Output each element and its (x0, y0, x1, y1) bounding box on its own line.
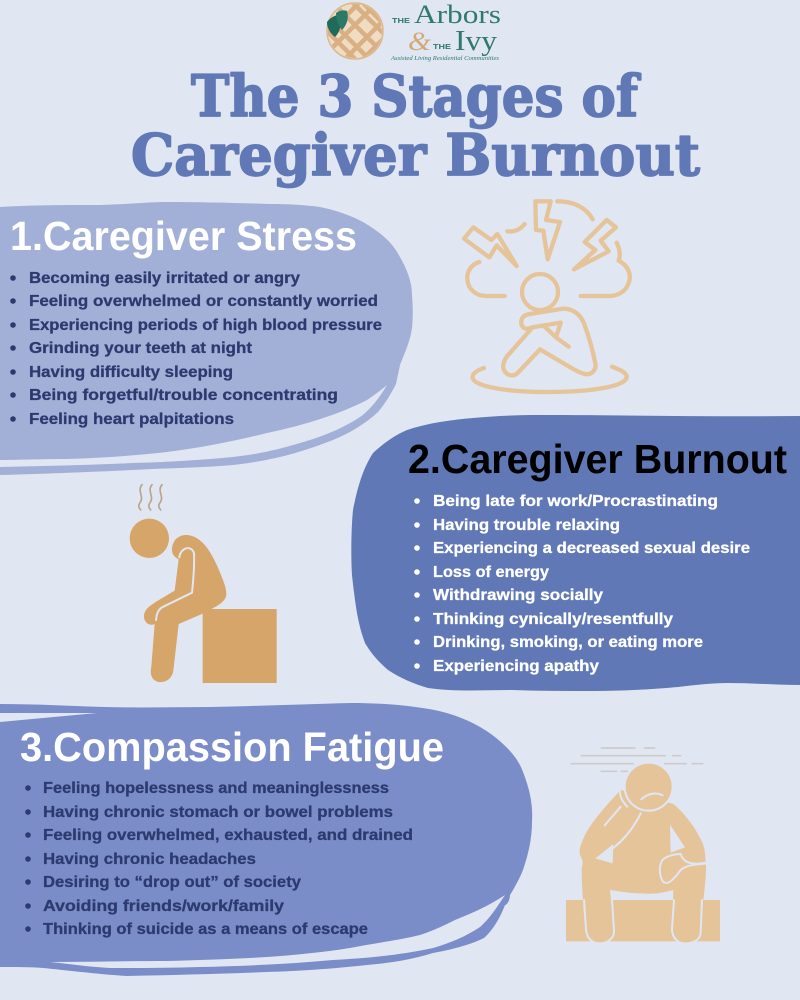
list 3: Desiring to “drop out” of society (43, 874, 301, 891)
list 2: Experiencing a decreased sexual desire (433, 540, 750, 557)
list 3: Having chronic headaches (43, 851, 256, 868)
body highlights (584, 790, 707, 943)
list 2: Experiencing apathy (433, 658, 599, 675)
list 1: Being forgetful/trouble concentrating (29, 387, 338, 404)
list 2: Drinking, smoking, or eating more (433, 634, 703, 651)
panel 3 blob with brush underline (0, 703, 532, 976)
box (203, 609, 277, 683)
list 2: Loss of energy (433, 564, 549, 581)
frown (641, 794, 663, 799)
bench (566, 900, 720, 941)
list 2: Withdrawing socially (433, 587, 603, 604)
body (144, 535, 226, 682)
panel 2 blob (351, 415, 800, 691)
list 3: Feeling overwhelmed, exhausted, and drained (43, 827, 413, 844)
list 3: Feeling hopelessness and meaninglessness (43, 780, 389, 797)
list 1: Experiencing periods of high blood pressure (29, 317, 382, 334)
list 3: Thinking of suicide as a means of escape (43, 921, 368, 938)
list 2 (414, 493, 750, 675)
icon: slumped person on box (130, 485, 277, 683)
logo wordmark: THE (392, 18, 410, 25)
list 1: Feeling heart palpitations (29, 411, 234, 428)
arm gap right (670, 825, 685, 853)
logo wordmark: Ivy (455, 26, 497, 57)
logo wordmark: & (408, 27, 432, 56)
list 2: Being late for work/Procrastinating (433, 493, 718, 510)
head (625, 763, 673, 811)
icon: lattice circle with leaves (326, 2, 384, 60)
icon: dejected person with head on hand (566, 748, 720, 943)
logo wordmark (390, 0, 501, 62)
list 1: Having difficulty sleeping (29, 364, 233, 381)
list 1: Feeling overwhelmed or constantly worried (29, 293, 378, 310)
logo wordmark: Arbors (414, 0, 501, 29)
brush sliver bottom (50, 895, 505, 968)
panel: caregiver stress (0, 202, 413, 475)
heading 1: 1.Caregiver Stress (10, 213, 357, 259)
brush sliver top (0, 713, 97, 722)
list 3: Avoiding friends/work/family (43, 898, 284, 915)
title: The 3 Stages of (191, 63, 641, 130)
panel: compassion fatigue (0, 703, 532, 976)
list 3 (25, 780, 413, 938)
icon: stressed person under storm (464, 201, 630, 392)
arm gap left (595, 844, 613, 863)
logo (322, 0, 501, 64)
list 1: Grinding your teeth at night (29, 340, 253, 357)
head (130, 519, 169, 558)
steam (139, 485, 162, 510)
heading 2: 2.Caregiver Burnout (408, 436, 787, 482)
panel: caregiver burnout (351, 415, 800, 691)
body (580, 790, 706, 943)
list 1: Becoming easily irritated or angry (29, 270, 300, 287)
panel 1 blob with brush underline (0, 202, 413, 475)
logo wordmark: Assisted Living Residential Communities (390, 55, 499, 62)
logo wordmark: THE (433, 44, 451, 51)
list 1 (10, 270, 382, 428)
title: Caregiver Burnout (131, 122, 701, 189)
list 3: Having chronic stomach or bowel problems (43, 804, 393, 821)
thought lines (571, 748, 703, 771)
title (131, 63, 701, 189)
list 2: Thinking cynically/resentfully (433, 611, 673, 628)
heading 3: 3.Compassion Fatigue (20, 724, 444, 770)
list 2: Having trouble relaxing (433, 517, 620, 534)
